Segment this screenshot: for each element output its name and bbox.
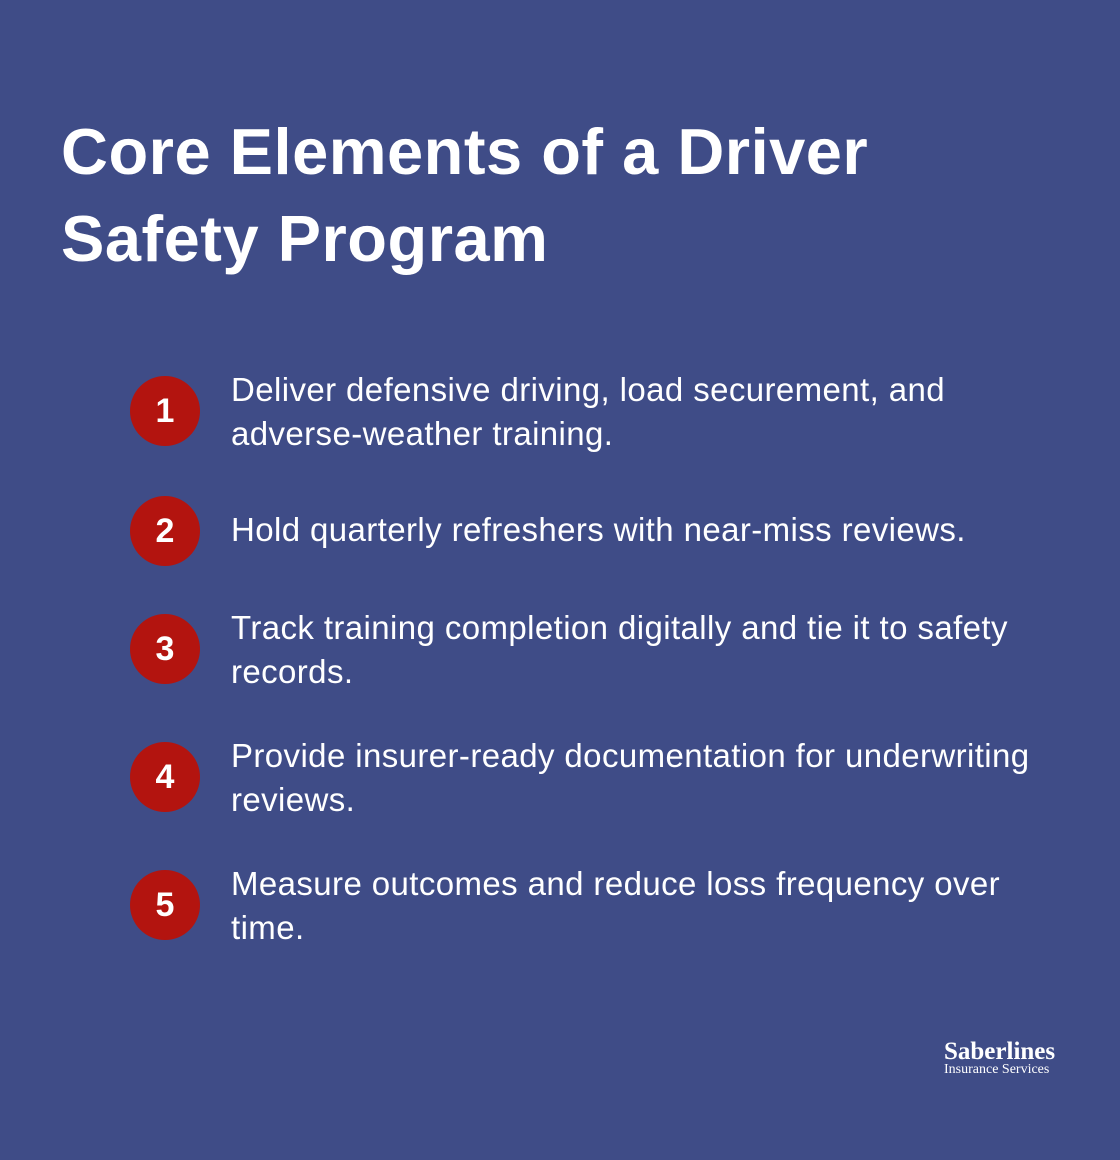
- text 4: [231, 737, 1030, 818]
- number badge 5: 5: [156, 886, 174, 924]
- text 5: Measure outcomes and reduce loss frequency over: [231, 865, 1000, 902]
- number badge 1: 1: [156, 392, 174, 430]
- item 1: [130, 371, 945, 452]
- logo: Insurance Services: [944, 1062, 1049, 1077]
- title: Safety Program: [61, 202, 548, 275]
- item 4: [130, 737, 1030, 818]
- item 3: [130, 609, 1008, 690]
- text 3: records.: [231, 653, 353, 690]
- logo: Saberlines: [944, 1038, 1055, 1065]
- title: Core Elements of a Driver: [61, 115, 868, 188]
- number badge 2: [130, 496, 200, 566]
- number badge 4: [130, 742, 200, 812]
- text 1: Deliver defensive driving, load securement, and: [231, 371, 945, 408]
- text 1: adverse-weather training.: [231, 415, 613, 452]
- item 2: [130, 496, 966, 566]
- text 4: Provide insurer-ready documentation for underwriting: [231, 737, 1030, 774]
- number badge 4: 4: [156, 758, 174, 796]
- text 5: [231, 865, 1000, 946]
- item 5: [130, 865, 1000, 946]
- number badge 3: 3: [156, 630, 174, 668]
- text 5: time.: [231, 909, 305, 946]
- text 3: Track training completion digitally and tie it to safety: [231, 609, 1008, 646]
- text 3: [231, 609, 1008, 690]
- number badge 5: [130, 870, 200, 940]
- text 2: Hold quarterly refreshers with near-miss reviews.: [231, 511, 966, 548]
- logo: [944, 1038, 1055, 1077]
- title: [61, 115, 868, 275]
- text 1: [231, 371, 945, 452]
- number badge 1: [130, 376, 200, 446]
- number badge 2: 2: [156, 512, 174, 550]
- number badge 3: [130, 614, 200, 684]
- text 4: reviews.: [231, 781, 355, 818]
